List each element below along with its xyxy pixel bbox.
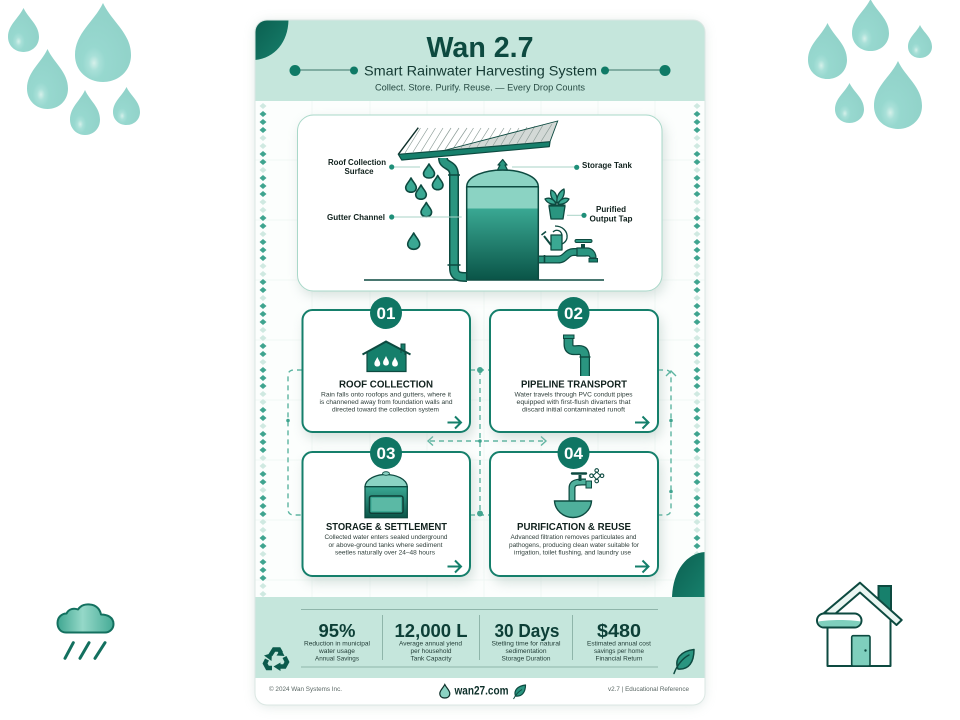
subtitle: Smart Rainwater Harvesting System xyxy=(364,62,597,78)
callout: purified output tap xyxy=(567,205,633,224)
stat: annual savings: water usage xyxy=(318,648,355,655)
flow connectors xyxy=(286,367,676,516)
description: discard initial contaminated runoft xyxy=(522,406,625,414)
icon: tap and basin with sparkle xyxy=(554,469,604,518)
stat: financial return: Estimated annual cost xyxy=(587,641,651,648)
callout: storage tank: Storage Tank xyxy=(582,161,633,170)
step badge 03: 03 xyxy=(377,444,395,463)
icon: storage tank xyxy=(365,472,407,518)
icon: leaf xyxy=(674,650,694,674)
output tap xyxy=(539,240,598,264)
side diamonds right xyxy=(694,103,700,554)
step badge 04: 04 xyxy=(564,444,583,463)
next arrow xyxy=(635,416,648,428)
ground line xyxy=(364,279,604,281)
title rule left xyxy=(290,65,358,76)
description: Rain falls onto roofops and gutters, where it xyxy=(321,392,451,398)
stat: annual savings: 95% xyxy=(318,620,356,641)
description xyxy=(324,534,448,556)
next arrow xyxy=(448,416,461,428)
panel: step 01 roof collection xyxy=(302,297,473,438)
stat: tank capacity: Tank Capacity xyxy=(410,656,452,662)
panel: step 03 storage and settlement xyxy=(302,437,473,582)
step badge 01 xyxy=(370,297,402,329)
callout: roof collection surface: Surface xyxy=(344,167,374,176)
stat: tank capacity: 12,000 L xyxy=(394,620,468,641)
callout: roof collection surface xyxy=(328,158,420,176)
next arrow xyxy=(635,560,648,572)
footer copyright: © 2024 Wan Systems Inc. xyxy=(269,685,342,693)
decorative raindrops top left xyxy=(8,3,140,135)
stat: annual savings: Reduction in municipal xyxy=(304,641,370,648)
stat: annual savings xyxy=(304,620,370,662)
step badge 02 xyxy=(558,297,590,329)
footer corner quarter circle xyxy=(672,552,705,597)
step badge 02: 02 xyxy=(564,304,583,323)
icon: footer leaf xyxy=(514,685,526,699)
heading: STORAGE & SETTLEMENT xyxy=(326,521,448,533)
icon: pipe elbow xyxy=(564,335,590,376)
stat: tank capacity: per household xyxy=(410,648,452,655)
decorative raindrops top right xyxy=(808,0,932,129)
stat: storage duration: Storage Duration xyxy=(502,656,551,662)
description: equipped with first-flush divarters that xyxy=(516,399,631,406)
icon: house with snowy roof xyxy=(817,583,902,666)
icon: recycling arrows xyxy=(264,649,287,671)
footer bar xyxy=(255,678,705,705)
storage tank xyxy=(467,160,538,280)
callout: gutter channel: Gutter Channel xyxy=(327,213,385,222)
stat: storage duration xyxy=(492,620,560,662)
step badge 04 xyxy=(558,437,590,469)
description xyxy=(514,392,632,414)
header corner quarter circle xyxy=(255,20,288,60)
stats rules xyxy=(301,610,658,667)
callout: roof collection surface: Roof Collection xyxy=(328,158,386,167)
footer version: v2.7 | Educational Reference xyxy=(608,686,689,693)
description: pathogens, producing clean water suitable for xyxy=(509,542,640,549)
side diamonds left xyxy=(260,103,266,597)
poster xyxy=(255,20,705,705)
stat: financial return: savings per home xyxy=(594,648,644,655)
callout: storage tank xyxy=(512,161,633,170)
stat: storage duration: 30 Days xyxy=(494,620,560,641)
step badge 03 xyxy=(370,437,402,469)
stat: financial return: Financial Return xyxy=(596,656,643,662)
stat: storage duration: Stetling time for natural xyxy=(492,641,560,648)
watering can xyxy=(542,226,567,250)
description: seetles naturally over 24–48 hours xyxy=(335,550,435,556)
heading: ROOF COLLECTION xyxy=(339,378,433,390)
title: Wan 2.7 xyxy=(426,32,534,64)
callout: purified output tap: Purified xyxy=(596,205,626,214)
description: irrigation, toilet flushing, and laundry use xyxy=(514,550,631,556)
potted plant xyxy=(545,189,569,219)
next arrow xyxy=(448,560,461,572)
footer site name: wan27.com xyxy=(454,686,508,698)
description: is channened away from foundation walls and xyxy=(320,399,453,406)
callout: purified output tap: Output Tap xyxy=(590,214,633,224)
description xyxy=(320,392,453,414)
description: Advanced filtration removes particulates and xyxy=(510,534,637,541)
stat: financial return: $480 xyxy=(597,620,641,641)
poster shadow xyxy=(256,22,704,706)
icon: footer drop xyxy=(440,684,450,698)
falling water drops xyxy=(406,164,443,249)
icon: house with drops xyxy=(362,342,410,372)
description: Collected water enters sealed underground xyxy=(324,534,448,541)
panel: step 04 purification and reuse xyxy=(490,437,661,582)
downpipe xyxy=(443,158,467,277)
icon: rain cloud xyxy=(58,604,114,658)
gutter channel xyxy=(398,142,550,160)
tagline: Collect. Store. Purify. Reuse. — Every Drop Counts xyxy=(375,82,585,94)
poster outline xyxy=(255,20,705,705)
stats band xyxy=(255,597,705,678)
heading: PIPELINE TRANSPORT xyxy=(521,378,628,390)
panel: step 02 pipeline transport xyxy=(490,297,661,438)
stat: annual savings: Annual Savings xyxy=(315,656,359,662)
description xyxy=(509,534,640,556)
step badge 01: 01 xyxy=(377,304,395,323)
panel: system diagram xyxy=(298,115,665,296)
description: directed toward the collection system xyxy=(332,406,439,414)
stat: financial return xyxy=(587,620,651,662)
title rule right xyxy=(601,65,670,76)
stat: tank capacity: Average annual yiend xyxy=(399,641,462,648)
stat: storage duration: sedimentation xyxy=(506,648,547,655)
description: or above-ground tanks where sediment xyxy=(328,542,443,549)
callout: gutter channel xyxy=(327,213,462,222)
roof surface xyxy=(398,121,558,154)
heading: PURIFICATION & REUSE xyxy=(517,521,631,533)
description: Water travels through PVC condutt pipes xyxy=(514,392,632,398)
header band xyxy=(255,20,705,101)
stat: tank capacity xyxy=(394,620,468,662)
